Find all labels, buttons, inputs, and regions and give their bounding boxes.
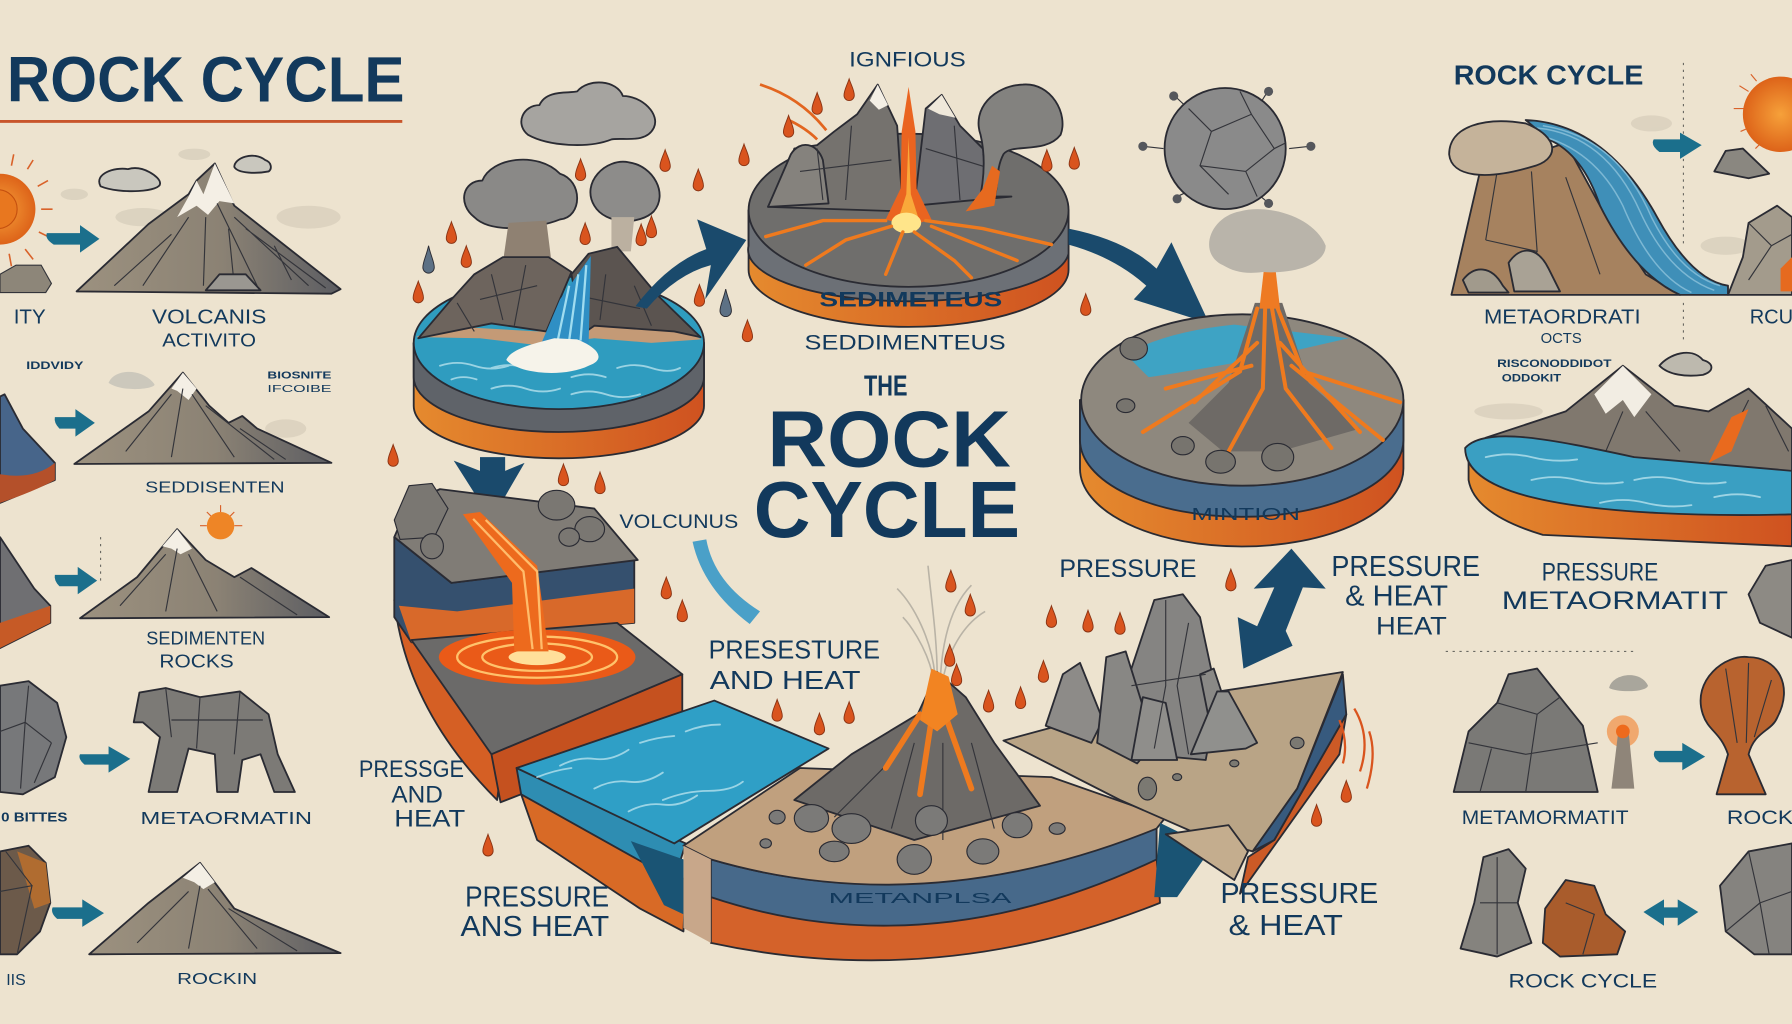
arrow: disc to disc [635,219,746,309]
label: METAORMATIN [141,808,312,828]
title: ROCK CYCLE [7,44,405,116]
rock mountains [418,247,701,338]
main heading: CYCLE [754,465,1020,554]
icon: rock [0,846,50,954]
disc top [749,134,1069,287]
label: AND [391,781,443,808]
icon: standing rock [1461,849,1531,957]
disc body [414,343,704,458]
panel: lake disc [1465,366,1792,546]
icon: sun [1734,74,1792,152]
label: ROCK CYCLE [1509,970,1657,992]
label: AND HEAT [710,665,861,695]
arrow [46,225,99,253]
water block [517,701,829,931]
panel: top cloud [521,82,655,145]
icon: spiked sphere rock [1138,87,1315,209]
arrow [55,409,95,437]
panel: right column [1449,60,1792,992]
arrow: down to step block [454,457,525,520]
label: PRESSURE [1221,878,1378,910]
foam [506,338,599,373]
label: BIOSNITE [267,370,332,381]
icon: rock [0,681,66,794]
label: ANS HEAT [461,911,609,943]
label: ODDOKIT [1502,373,1561,385]
label: HEAT [1376,612,1447,640]
icon: sun and rocks [0,154,53,293]
label: IFCOIBE [267,384,332,395]
icon: polygonal rock [1720,843,1792,954]
eruption [1209,209,1326,309]
lava streaks [760,85,826,139]
right sand block [1003,672,1346,894]
panel: right volcano disc [1080,209,1403,547]
icon: mountain [89,863,341,954]
disc top [1081,314,1403,486]
label: ROCK CYCLE [1454,60,1643,91]
center volcano [794,566,1040,840]
mountains [768,85,1011,211]
label: PRESSGE [359,756,464,783]
boulders [760,805,1065,874]
arrow [1653,133,1702,159]
icon: rock cluster [1454,669,1598,792]
icon: cloud [99,168,160,191]
label: VOLCUNUS [619,511,738,533]
arrow: disc to right disc [1069,229,1209,323]
label: & HEAT [1345,581,1448,613]
rock spires [1046,594,1257,763]
arrow [79,746,130,773]
icon: brown hill and wave [1449,120,1728,295]
labels: center [359,511,1480,943]
icon: mountain [74,373,331,464]
sand rim [416,326,702,345]
label: PRESSURE [465,881,609,913]
label: ROCKIN [177,971,257,988]
label: PRESESTURE [709,634,880,664]
disc body [1080,400,1403,547]
volcano [1143,303,1400,451]
label: IDDVIDY [26,360,84,372]
boulders [1117,337,1294,473]
step block: lava [394,483,682,802]
label: OCTS [1541,331,1582,347]
icon: heat lines [1339,709,1373,789]
icon: mountain [77,163,341,294]
arrow [1643,899,1698,926]
arrow: light blue [693,539,760,624]
arrow [55,567,97,594]
main heading: THE [864,370,907,402]
label: VOLCANIS [152,305,266,328]
label: IIS [6,972,26,989]
label: ROCKS [159,650,234,671]
label: sedimenteus: SEDDIMENTEUS [805,330,1006,355]
panel: left column [0,154,341,989]
main heading [754,370,1020,554]
icon: partial rock [1749,560,1792,638]
label: & HEAT [1229,910,1343,942]
label: PRESSURE [1059,555,1197,583]
dark wedges [631,823,1211,914]
icon: rock pile with lava [1728,206,1792,295]
label: igneous: IGNFIOUS [849,46,966,71]
icon: partial mountain disc [0,394,55,503]
main heading: ROCK [767,394,1011,483]
icon: cloud [109,372,155,389]
icon: cloud [234,156,271,173]
label on disc: MINTION [1191,504,1300,524]
label: SEDIMENTEN [146,628,265,649]
panel: igneous disc [748,84,1069,327]
icon: lava burst [1607,715,1639,789]
icon: rock animal [134,688,295,792]
icon: cloud [1659,353,1711,376]
disc body [748,210,1069,327]
label: PRESSURE [1542,559,1658,587]
label: ITY [14,305,46,328]
waterfall [541,256,591,345]
label: ROCK [1727,807,1792,829]
panel: waterfall disc [414,160,704,458]
label on disc: SEDIMETEUS [819,286,1002,311]
icon: partial disc [0,537,50,648]
eruption clouds [464,160,660,263]
icon: small sun [200,505,242,539]
icon: lava drops [388,79,1351,856]
icon: brown rock [1543,880,1625,957]
label: RISCONODDIDOT [1497,358,1611,370]
water arc [1126,325,1349,377]
icon: mountain [80,529,329,618]
lava column [886,87,931,233]
panel: bottom arc [394,483,1346,960]
icon: cloud [1609,675,1648,691]
label: 0 BITTES [1,811,67,825]
label: ACTIVITO [162,329,256,350]
lava cracks [766,221,1051,278]
arrow [1654,743,1705,770]
label: PRESSURE [1331,551,1480,583]
sand block [683,768,1166,960]
label on block: METANPLSA [829,891,1012,907]
label: METAORMATIT [1502,587,1728,615]
label: SEDDISENTEN [145,480,285,497]
arrow: double headed [1238,549,1326,669]
label: HEAT [394,805,466,832]
label: METAMORMATIT [1462,807,1629,829]
label: METAORDRATI [1484,305,1641,328]
icon: mushroom rock [1701,657,1784,794]
smoke column [966,84,1063,211]
water [414,277,704,409]
icon: rock [1714,149,1769,178]
arrow [52,899,104,927]
